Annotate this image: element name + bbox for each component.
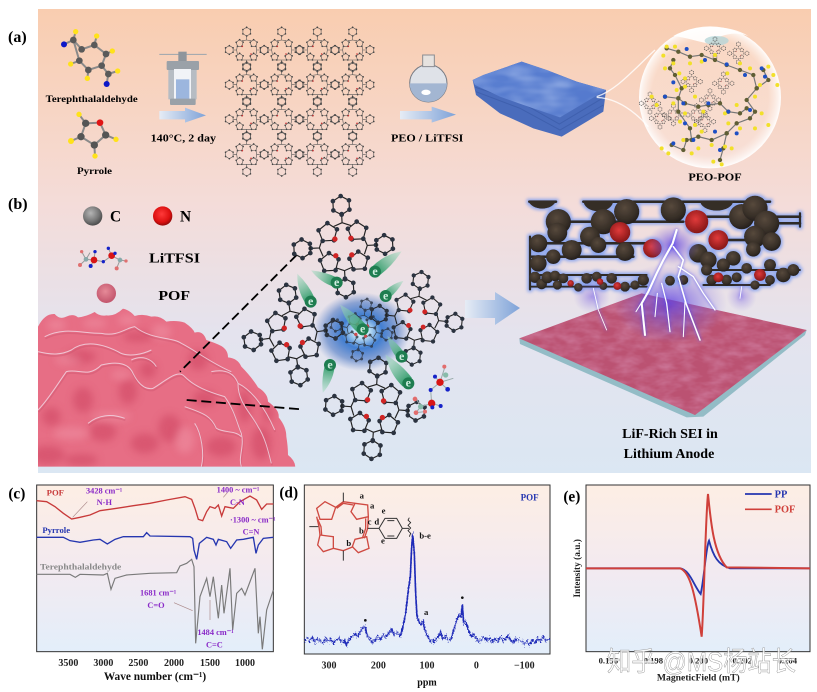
annotations: 3428 cm⁻¹ xyxy=(86,486,123,495)
series labels: Pyrrole xyxy=(42,525,70,535)
annotations: C=C xyxy=(206,640,223,649)
x axis ticks: 0.198 xyxy=(644,656,664,666)
icon: lightning xyxy=(593,230,742,340)
icon: flask xyxy=(410,55,447,102)
panel b: legend and POF particle xyxy=(25,193,467,480)
legend: LiTFSI molecule xyxy=(78,247,128,270)
x axis ticks: 0.204 xyxy=(778,656,798,666)
annotations: 1484 cm⁻¹ xyxy=(197,628,234,637)
molecule: terephthalaldehyde xyxy=(61,29,120,87)
plot frame xyxy=(304,485,550,654)
curve: Terephthalaldehyde xyxy=(37,559,273,649)
magnifier lines xyxy=(597,50,655,127)
y axis title: Intensity (a.u.) xyxy=(572,539,583,597)
arrow: PEO LiTFSI xyxy=(400,107,456,123)
annotation leaders xyxy=(73,493,227,620)
panel label e: (e) xyxy=(563,489,580,506)
annotations: 1400 ~ cm⁻¹ xyxy=(217,485,260,494)
panel d: NMR chart xyxy=(279,484,550,688)
panel label c: (c) xyxy=(8,485,25,502)
porous fragments xyxy=(639,37,749,132)
icon: bubble with PEO-POF xyxy=(639,26,781,168)
plot frame xyxy=(586,485,810,652)
structure letters: a xyxy=(370,501,375,511)
glow: central charge xyxy=(647,223,700,267)
molecule: POF units xyxy=(237,193,467,462)
x axis ticks: 2000 xyxy=(164,658,184,669)
label: LiF-rich SEI: LiF-Rich SEI in xyxy=(622,427,718,442)
molecule: pyrrole xyxy=(68,112,119,159)
chart: porous organic framework network xyxy=(226,27,374,176)
structure letters: e xyxy=(381,536,385,546)
series label: POF xyxy=(521,493,539,503)
structure letters xyxy=(346,491,431,617)
x axis ticks: 100 xyxy=(420,660,434,671)
x axis title: ppm xyxy=(417,677,437,688)
curve: PP xyxy=(586,541,810,594)
label: a: (a) xyxy=(8,29,27,46)
legend xyxy=(745,490,795,516)
illustration: molecular layer xyxy=(528,196,800,292)
label: conditions: 140°C, 2 day xyxy=(151,134,217,145)
x axis ticks: 2500 xyxy=(128,658,148,669)
icons: electrons: e xyxy=(334,275,340,289)
panel label d: (d) xyxy=(279,484,298,501)
curve: NMR spectrum xyxy=(304,534,550,645)
icon: autoclave xyxy=(159,52,207,105)
glow: plate lightning xyxy=(613,263,727,343)
x axis ticks: 0.202 xyxy=(733,656,752,666)
x axis title: Wave number (cm⁻¹) xyxy=(104,671,206,683)
watermark: 知乎 @MS杨站长 xyxy=(607,647,796,677)
x axis ticks: 3000 xyxy=(93,658,113,669)
dashed zoom line lower xyxy=(187,400,302,409)
x axis ticks xyxy=(599,656,798,666)
legend: POF xyxy=(775,505,795,516)
molecule: LiTFSI near POF xyxy=(413,365,453,415)
curve: Pyrrole xyxy=(37,533,273,559)
annotations: ·1300 ~ cm⁻¹ xyxy=(230,515,276,524)
legend: POF label: POF xyxy=(158,289,190,304)
illustration: lithium plate xyxy=(519,293,807,417)
x axis ticks: 1500 xyxy=(200,658,220,669)
label: b: (b) xyxy=(8,196,28,213)
x axis ticks: 0 xyxy=(474,660,479,671)
arrow: large panel b xyxy=(465,292,520,325)
structure letters: b xyxy=(359,526,364,536)
annotations xyxy=(86,485,276,649)
annotations: C=O xyxy=(147,601,165,610)
panel b: SEI illustration xyxy=(519,196,807,417)
annotations: C=N xyxy=(243,527,259,536)
x axis ticks: 300 xyxy=(322,660,336,671)
structure letters: c xyxy=(368,517,372,527)
atoms yellow xyxy=(652,47,777,164)
panel a: precursors xyxy=(46,27,374,177)
icons: electrons: e xyxy=(308,294,314,308)
panel: schematic background a and b xyxy=(38,9,811,473)
x axis ticks: 1000 xyxy=(235,658,255,669)
icons: electrons: e xyxy=(327,357,333,371)
peak dots xyxy=(364,596,464,622)
glow: side charge left xyxy=(573,280,610,313)
panel e: EPR chart xyxy=(563,485,810,683)
label: PEO LiTFSI: PEO / LiTFSI xyxy=(391,133,463,144)
structure: porphyrin with phenyl xyxy=(309,493,411,561)
series labels xyxy=(40,488,121,571)
structure letters: a xyxy=(360,491,365,501)
curve: POF xyxy=(586,494,810,637)
x axis ticks: 3500 xyxy=(58,658,78,669)
annotations: C-N xyxy=(230,498,245,507)
icon: polymer membrane xyxy=(473,62,606,137)
x axis ticks: 0.196 xyxy=(599,656,619,666)
x axis ticks xyxy=(322,660,535,671)
legend: C xyxy=(83,206,121,226)
legend: LiTFSI label: LiTFSI xyxy=(149,252,200,267)
atoms blue xyxy=(665,49,765,150)
panel a: membrane and bubble xyxy=(391,26,781,183)
structure letters: b-e xyxy=(419,530,431,540)
arrow: reaction xyxy=(159,108,206,123)
plot frame xyxy=(37,485,273,652)
panel c: FTIR chart xyxy=(8,485,276,683)
molecule label: terephthalaldehyde: Terephthalaldehyde xyxy=(46,94,138,105)
illustration: POF particle xyxy=(38,308,296,467)
curve: POF xyxy=(37,496,273,521)
structure letters: e xyxy=(382,506,386,516)
legend: C: C xyxy=(110,208,121,225)
label: lithium anode: Lithium Anode xyxy=(624,447,714,462)
legend: N xyxy=(153,206,191,226)
icons: electrons: e xyxy=(360,322,366,336)
x axis title: MagneticField (mT) xyxy=(657,672,740,683)
dashed zoom line upper xyxy=(180,255,297,372)
legend: PP xyxy=(775,490,788,501)
structure letters: d xyxy=(374,517,379,527)
legend: N: N xyxy=(180,208,191,225)
icons: electrons: e xyxy=(383,288,389,302)
legend: POF sphere xyxy=(97,284,116,303)
icons: electrons: e xyxy=(372,264,378,278)
molecule label: pyrrole: Pyrrole xyxy=(77,166,113,177)
glow: side charge right xyxy=(727,282,757,312)
structure letters: a xyxy=(424,607,429,617)
icons: electrons: e xyxy=(399,349,405,363)
PEO chains xyxy=(665,48,768,160)
glow: electron centre xyxy=(313,292,410,371)
icons: electrons xyxy=(291,245,414,394)
x axis ticks: 200 xyxy=(371,660,386,671)
label: PEO-POF: PEO-POF xyxy=(688,171,742,183)
structure letters: b xyxy=(346,538,351,548)
icons: electrons: e xyxy=(406,376,412,390)
x axis ticks xyxy=(58,658,255,669)
annotations: 1681 cm⁻¹ xyxy=(140,589,177,598)
x axis ticks: 0.200 xyxy=(689,656,708,666)
annotations: N-H xyxy=(97,498,112,507)
x axis ticks: −100 xyxy=(514,660,535,671)
series labels: Terephthalaldehyde xyxy=(40,561,121,571)
series labels: POF xyxy=(47,488,64,498)
